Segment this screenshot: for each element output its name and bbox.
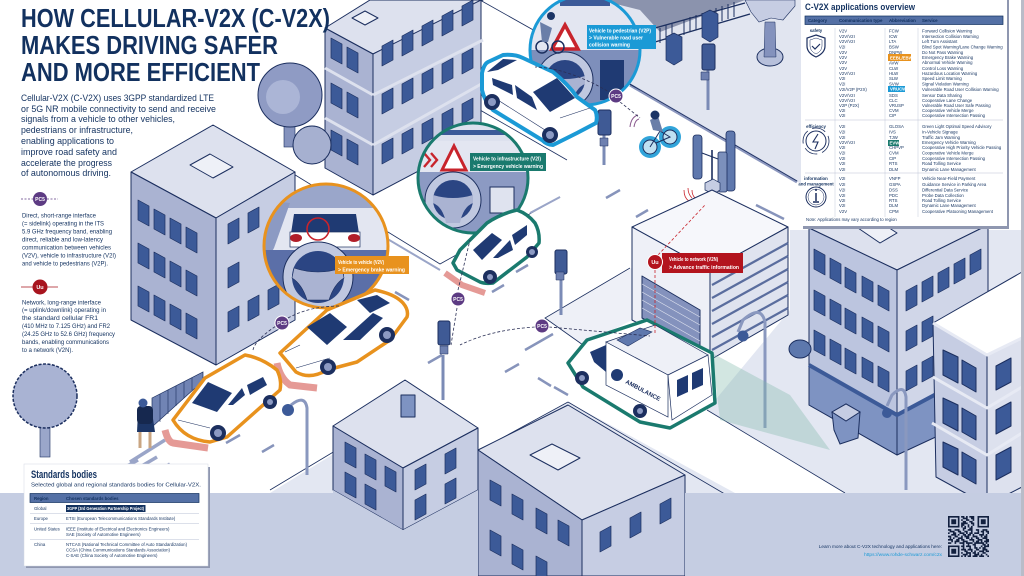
table rows: safety: [839, 28, 1003, 118]
table rows: information and management: V2I: [839, 176, 845, 181]
house: bottom centre: [478, 405, 685, 576]
legend: PC5: communication between vehicles: [22, 244, 111, 252]
table rows: efficiency: Cooperative Vehicle Merge: [922, 150, 974, 156]
car: centre, green outline: [445, 210, 539, 293]
table rows: information and management: V2I: [839, 182, 845, 187]
table rows: safety: Vulnerable Road User Safe Passing: [922, 103, 991, 108]
table rows: information and management: [839, 176, 994, 214]
table rows: safety: SVW: [889, 82, 900, 86]
table rows: safety: Left Turn Assistant: [922, 39, 958, 44]
panel: standards bodies: 3GPP (3rd Generation Partnership Project): [67, 506, 145, 511]
table rows: safety: V2I/V2P (P2X): [839, 87, 867, 92]
legend: Uu: the standard cellular FR1: [22, 315, 99, 322]
blue callout label: > Vulnerable road user: [589, 36, 644, 42]
legend: PC5: and vehicle to pedestrians (V2P).: [22, 260, 108, 268]
callout: vehicle to network: Uu: [651, 260, 659, 266]
panel: standards bodies: ETSI (European Telecommunications Standards Institute): [66, 516, 176, 521]
table rows: efficiency: V2I: [839, 124, 845, 129]
table rows: safety: Blind Spot Warning/Lane Change Warning: [922, 44, 1003, 50]
green callout label: > Emergency vehicle warning: [473, 164, 544, 170]
panel: applications overview: Abbreviation: [889, 18, 916, 23]
antenna tower: [684, 131, 736, 239]
table rows: safety: Hazardous Location Warning: [922, 71, 978, 76]
manhole, bin and lamps, right: [282, 312, 906, 490]
blue callout label: collision warning: [589, 42, 631, 48]
intro text: improve road safety and: [21, 147, 117, 157]
intro text: enabling applications to: [21, 136, 114, 146]
panel: standards bodies: Standards bodies: [31, 469, 97, 481]
badge: PC5 left: [275, 316, 289, 330]
legend: Uu: to a network (V2N).: [22, 347, 73, 354]
green callout label: [470, 153, 546, 171]
table rows: efficiency: V2I: [839, 156, 845, 161]
table rows: efficiency: [839, 124, 1002, 172]
tree: top: [258, 63, 331, 164]
table rows: efficiency: V2I: [839, 145, 845, 150]
table rows: information and management: V2V: [839, 209, 847, 214]
table rows: efficiency: Green Light Optimal Speed Advisory: [922, 124, 992, 129]
blue callout label: Vehicle to pedestrian (V2P): [589, 28, 651, 34]
table rows: information and management: DSS: [889, 188, 898, 192]
table rows: information and management: CPM: [889, 209, 899, 214]
table rows: information and management: DLM: [889, 203, 898, 208]
green callout: vehicle to infrastructure: [415, 123, 535, 237]
table rows: safety: FCW: [889, 28, 900, 34]
legend: PC5: Direct, short-range interface: [22, 212, 97, 220]
table rows: safety: V2V: [839, 50, 847, 55]
ambulance, green outline: [568, 320, 715, 428]
table rows: efficiency: IVS: [889, 130, 896, 134]
table rows: efficiency: CIP: [889, 156, 896, 161]
table rows: safety: Signal Violation Warning: [922, 82, 969, 86]
panel: standards bodies: IEEE (Institute of Electrical and Electronics Engineers): [66, 526, 170, 532]
table rows: safety: Cooperative Lane Change: [922, 98, 973, 103]
QR code: [948, 517, 989, 556]
badge: PC5 centre: PC5: [453, 297, 463, 303]
table rows: safety: V2P (P2X): [839, 103, 860, 108]
table rows: efficiency: Traffic Jam Warning: [922, 135, 961, 140]
building: centre right with garage door: [632, 190, 788, 360]
table rows: efficiency: CHPVP: [889, 145, 904, 150]
panel: applications overview: C-V2X applications overview: [805, 2, 916, 12]
intro text: pedestrians or infrastructure,: [21, 125, 133, 135]
legend: Uu: (24.25 GHz to 52.6 GHz) frequency: [22, 331, 116, 338]
panel: applications overview: efficiency: [806, 124, 827, 129]
table rows: safety: CLW: [889, 66, 899, 71]
icon: efficiency bolt: [803, 128, 829, 154]
car: top, blue outline: [482, 55, 597, 145]
badge: PC5 right: PC5: [537, 324, 547, 330]
table rows: safety: V2I: [839, 44, 845, 50]
intro text: of autonomous driving.: [21, 168, 111, 178]
panel: applications overview: and management: [798, 182, 834, 186]
table rows: efficiency: V2I: [839, 130, 845, 134]
table rows: efficiency: Cooperative Intersection Passing: [922, 156, 986, 161]
panel: standards bodies: China: [34, 542, 46, 547]
legend: Uu: Uu: [36, 285, 44, 291]
table rows: efficiency: DLM: [889, 167, 898, 172]
table rows: safety: SDS: [889, 93, 898, 98]
table rows: information and management: Cooperative Platooning Management: [922, 209, 994, 214]
table rows: safety: Emergency Brake Warning: [922, 55, 974, 60]
table rows: safety: Forward Collision Warning: [922, 28, 973, 34]
intro text: or 5G NR mobile connectivity to send and receive: [21, 104, 216, 114]
learn more text: [819, 544, 943, 558]
ground: sidewalks: [226, 0, 1024, 500]
panel: standards bodies: Region: [34, 496, 49, 501]
panel: applications overview: Communication type: [839, 18, 883, 23]
car: sedan, orange outline: [277, 290, 408, 388]
legend: PC5: direct, reliable and low-latency: [22, 236, 104, 244]
table rows: efficiency: V2V/V2I: [839, 140, 855, 145]
intro text: [21, 93, 216, 178]
panel: standards bodies: United States: [34, 526, 60, 532]
badge: PC5 top: [609, 89, 623, 103]
orange callout label: Vehicle to vehicle (V2V): [338, 260, 384, 266]
table rows: safety: Cooperative Intersection Passing: [922, 113, 986, 118]
orange callout label: [335, 256, 409, 274]
table rows: safety: Speed Limit Warning: [922, 76, 962, 81]
table rows: safety: Control Loss Warning: [922, 66, 964, 71]
badge: PC5 top: PC5: [611, 94, 621, 100]
orange callout label: > Emergency brake warning: [338, 268, 406, 274]
table rows: safety: Cooperative Vehicle Merge: [922, 108, 974, 113]
legend: PC5: (V2V), vehicle to infrastructure (V2I): [22, 252, 116, 260]
table rows: information and management: VNFP: [889, 176, 901, 181]
table rows: information and management: V2I: [839, 203, 845, 208]
table rows: safety: V2V: [839, 60, 847, 65]
table rows: safety: V2I: [839, 108, 845, 113]
panel: applications overview: Category: [808, 18, 828, 23]
cyclist: [630, 110, 681, 158]
fence and pedestrian: [120, 372, 203, 472]
table rows: safety: V2V: [839, 28, 847, 34]
panel: standards bodies: [24, 464, 210, 568]
table rows: safety: ICW: [889, 34, 898, 39]
icon: information: [806, 187, 826, 207]
title: [21, 3, 330, 87]
callout: vehicle to network: Vehicle to network (V2N): [669, 257, 718, 263]
learn more text: Learn more about C-V2X technology and applications here:: [819, 544, 942, 549]
panel: applications overview: Note: Applications may vary according to region: [806, 217, 897, 222]
panel: standards bodies: Selected global and regional standards bodies for Cellular-V2X.: [31, 482, 202, 488]
table rows: information and management: Road Tolling Service: [922, 198, 962, 203]
badge: PC5 centre: [451, 292, 465, 306]
table rows: efficiency: Dynamic Lane Management: [922, 167, 977, 172]
signal paths: [253, 67, 705, 350]
table rows: safety: CLC: [889, 98, 898, 103]
table rows: safety: V2V: [839, 66, 847, 71]
table rows: information and management: Guidance Service in Parking Area: [922, 182, 987, 187]
table rows: efficiency: GLOSA: [889, 124, 904, 129]
table rows: safety: VRUCW: [890, 87, 907, 92]
table rows: safety: CVM: [889, 108, 899, 113]
table rows: safety: DNPW: [889, 50, 903, 55]
table rows: safety: Intersection Collision Warning: [922, 34, 979, 39]
badge: PC5 left: PC5: [277, 321, 287, 327]
top fence and trees, upper right: [600, 0, 795, 66]
badge: PC5 right: [535, 319, 549, 333]
panel: standards bodies: Chosen standards bodies: [66, 496, 119, 501]
panel: standards bodies: NTCAS (National Technical Committee of Auto Standardization): [66, 542, 188, 547]
table rows: efficiency: EVW: [890, 140, 900, 146]
intro text: Cellular-V2X (C-V2X) uses 3GPP standardized LTE: [21, 93, 214, 103]
table rows: safety: V2V/V2I: [839, 34, 855, 39]
building: bottom right corner: [932, 272, 1022, 505]
icon: safety shield: [807, 35, 825, 57]
table rows: safety: Do Not Pass Warning: [922, 50, 964, 55]
table rows: safety: Vulnerable Road User Collision Warning: [922, 87, 999, 92]
table rows: information and management: GSPA: [889, 182, 901, 187]
traffic lights: [438, 44, 715, 400]
blue callout: vehicle to pedestrian: [530, 0, 640, 110]
learn more text: https://www.rohde-schwarz.com/c2x: [864, 552, 943, 558]
intro text: accelerate the progress: [21, 158, 112, 168]
house: bottom left: [333, 380, 478, 530]
table rows: information and management: Probe Data Collection: [922, 193, 964, 198]
panel: standards bodies: CCSA (China Communications Standards Association): [66, 548, 170, 552]
title: MAKES DRIVING SAFER: [21, 30, 278, 60]
title: HOW CELLULAR-V2X (C-V2X): [21, 3, 330, 33]
table rows: efficiency: V2I: [839, 167, 845, 172]
table rows: safety: LTA: [889, 39, 896, 44]
building: top centre: [325, 0, 483, 195]
table rows: safety: HLW: [889, 71, 899, 76]
table rows: safety: V2I: [839, 82, 845, 86]
panel: standards bodies: Europe: [34, 516, 48, 521]
table rows: efficiency: In-Vehicle Signage: [922, 130, 958, 134]
legend: Uu: (= uplink/downlink) operating in: [22, 307, 107, 314]
table rows: efficiency: Cooperative High Priority Vehicle Passing: [922, 145, 1002, 150]
legend: PC5: 5.9 GHz frequency band, enabling: [22, 228, 113, 236]
legend: Uu: (410 MHz to 7.125 GHz) and FR2: [22, 323, 111, 330]
table rows: safety: EEBL/EBW: [890, 55, 914, 60]
table rows: information and management: V2I: [839, 188, 845, 192]
legend: Uu: Network, long-range interface: [22, 300, 102, 306]
table rows: safety: V2V/V2I: [839, 71, 855, 76]
panel: applications overview: [798, 0, 1009, 229]
table rows: efficiency: RTS: [889, 161, 898, 166]
table rows: efficiency: Emergency Vehicle Warning: [922, 140, 976, 145]
green callout label: Vehicle to infrastructure (V2I): [473, 156, 541, 162]
table rows: information and management: Vehicle Near-Field Payment: [922, 176, 976, 181]
panel: standards bodies: SAE (Society of Automotive Engineers): [66, 532, 141, 537]
legend: PC5: [21, 192, 116, 268]
table rows: safety: V2V/V2I: [839, 98, 855, 103]
title: AND MORE EFFICIENT: [21, 57, 260, 87]
table rows: safety: CIP: [889, 113, 896, 118]
building: right: [809, 205, 988, 455]
blue callout label: [587, 25, 656, 49]
table rows: information and management: Differential Data Service: [922, 188, 969, 192]
panel: standards bodies: Global: [34, 506, 46, 511]
panel: applications overview: information: [804, 176, 828, 181]
table rows: information and management: V2I: [839, 198, 845, 203]
table rows: safety: VRUSP: [889, 103, 904, 108]
legend: PC5: PC5: [35, 197, 45, 203]
table rows: efficiency: V2I: [839, 161, 845, 166]
table rows: information and management: V2I: [839, 193, 845, 198]
table rows: safety: V2I: [839, 76, 845, 81]
table rows: safety: BSW: [889, 44, 900, 50]
table rows: efficiency: V2I: [839, 135, 845, 140]
table rows: efficiency: Road Tolling Service: [922, 161, 962, 166]
table rows: safety: SLW: [889, 76, 899, 81]
table rows: safety: Sensor Data Sharing: [922, 93, 962, 98]
table rows: safety: V2V/V2I: [839, 39, 855, 44]
table rows: information and management: RTS: [889, 198, 898, 203]
intro text: signals from a vehicle to other vehicles,: [21, 114, 175, 124]
tree: bottom left: [13, 364, 77, 457]
legend: Uu: [21, 280, 116, 354]
panel: standards bodies: C-SAE (China Society of Automotive Engineers): [66, 553, 158, 558]
ambulance, green outline: AMBULANCE: [624, 379, 661, 403]
orange callout: vehicle to vehicle: [260, 184, 390, 312]
table rows: information and management: Dynamic Lane Management: [922, 203, 977, 208]
table rows: efficiency: TJW: [889, 135, 899, 140]
table rows: safety: V2V/V2I: [839, 93, 855, 98]
table rows: safety: V2V: [839, 55, 847, 60]
car: hatchback, orange outline: [165, 355, 281, 448]
table rows: efficiency: V2I: [839, 150, 845, 156]
table rows: safety: V2I: [839, 113, 845, 118]
table rows: efficiency: CVM: [889, 150, 899, 156]
table rows: safety: AVW: [889, 60, 899, 66]
legend: Uu: bands, enabling communications: [22, 339, 109, 346]
table rows: safety: Abnormal Vehicle Warning: [922, 60, 973, 65]
callout: vehicle to network: > Advance traffic information: [669, 265, 740, 271]
panel: applications overview: safety: [810, 28, 823, 33]
panel: applications overview: Service: [922, 18, 938, 23]
legend: PC5: (= sidelink) operating in the ITS: [22, 220, 104, 228]
building: left: [131, 125, 295, 365]
table rows: information and management: PDC: [889, 193, 898, 198]
callout: vehicle to network: [648, 253, 743, 273]
